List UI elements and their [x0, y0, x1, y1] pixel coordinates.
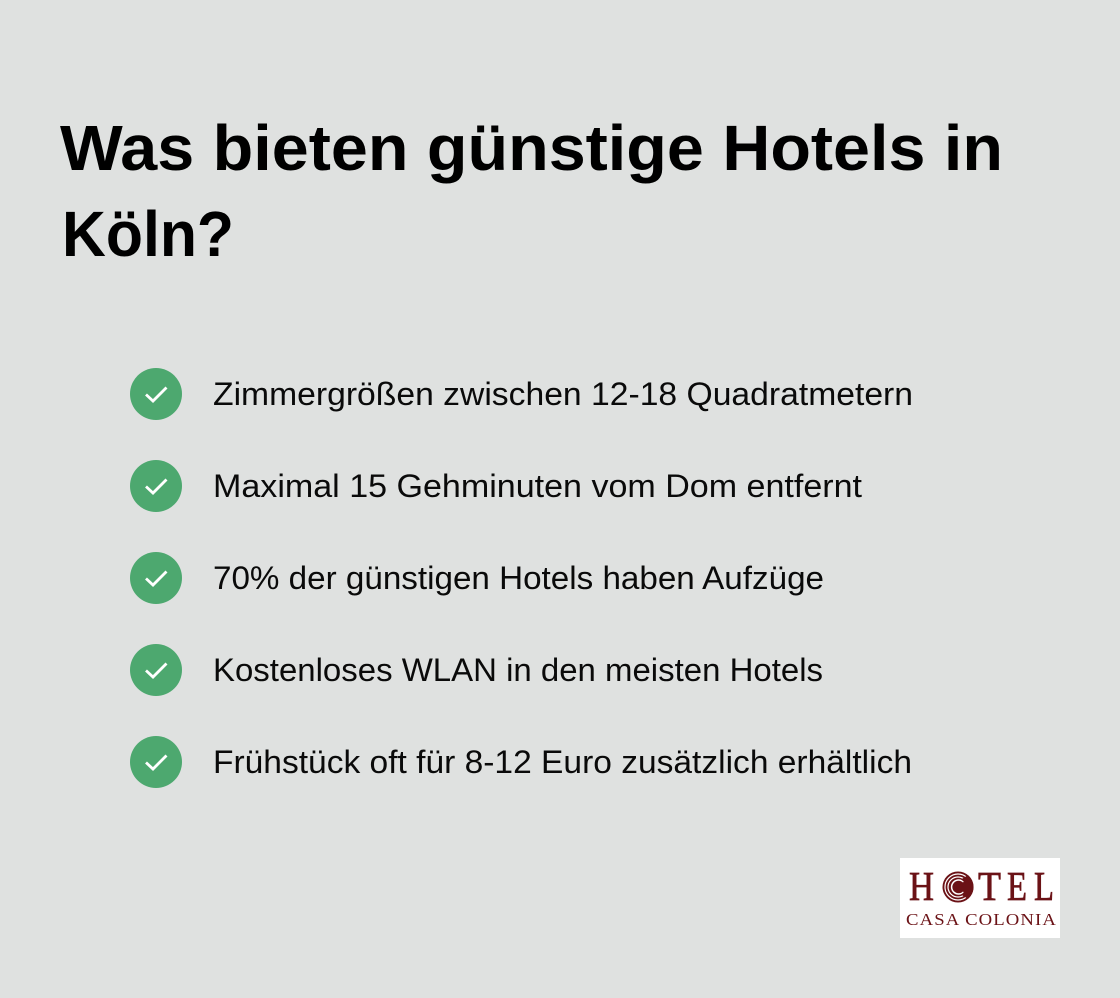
logo: Hotel Casa Colonia: T [978, 863, 1001, 909]
title: Köln? [62, 198, 234, 270]
list item: breakfast [130, 736, 912, 788]
logo: Hotel Casa Colonia: H [909, 863, 934, 909]
list item: distance to the cathedral: Maximal 15 Gehminuten vom Dom entfernt [213, 468, 862, 504]
list item: room sizes [130, 368, 913, 420]
title: Was bieten günstige Hotels in [60, 112, 1003, 184]
list item: free wifi: Kostenloses WLAN in den meisten Hotels [213, 652, 823, 688]
title [60, 112, 1003, 270]
icon: concentric C emblem [942, 872, 974, 902]
logo: Hotel Casa Colonia: L [1034, 863, 1054, 909]
list: hotel features [130, 368, 913, 788]
list item: room sizes: Zimmergrößen zwischen 12-18 Quadratmetern [213, 376, 913, 412]
list item: distance to the cathedral [130, 460, 862, 512]
logo: Hotel Casa Colonia: E [1007, 863, 1027, 909]
list item: elevators: 70% der günstigen Hotels haben Aufzüge [213, 560, 824, 596]
logo: Hotel Casa Colonia: CASA COLONIA [906, 910, 1057, 929]
list item: elevators [130, 552, 824, 604]
list item: breakfast: Frühstück oft für 8-12 Euro zusätzlich erhältlich [213, 744, 912, 780]
logo: Hotel Casa Colonia [900, 858, 1060, 938]
list item: free wifi [130, 644, 823, 696]
